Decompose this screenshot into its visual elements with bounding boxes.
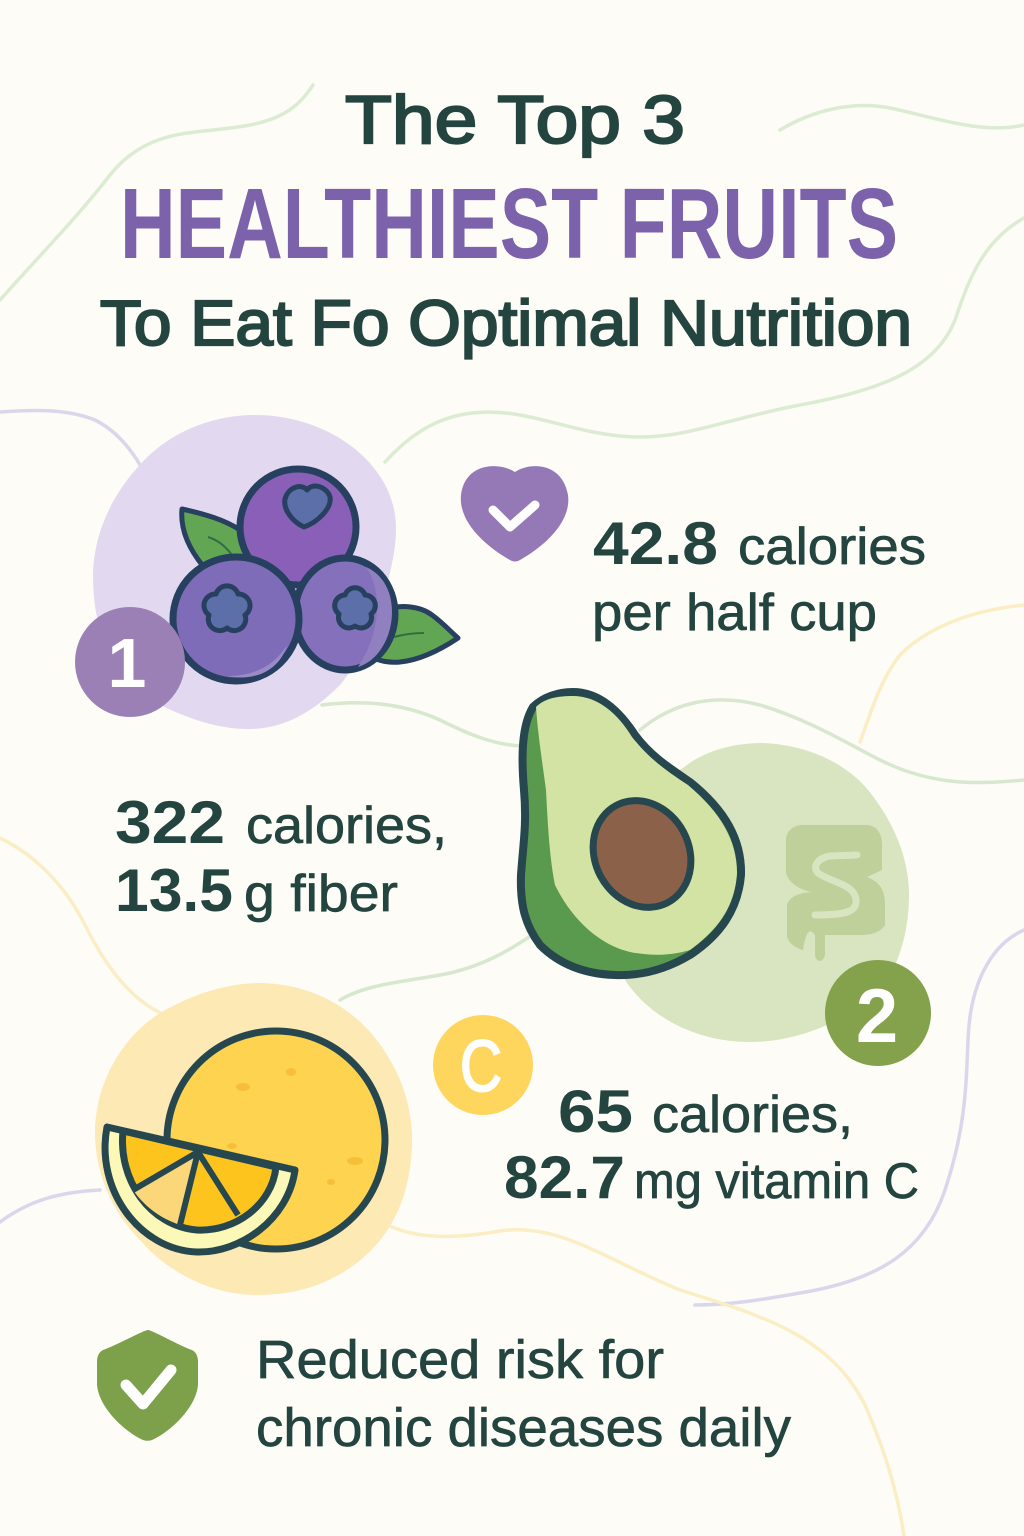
panel: avocado <box>521 692 931 1066</box>
icon: whole fruit <box>167 1031 385 1249</box>
icon: top berry <box>240 469 356 585</box>
text: blueberry stats: calories <box>738 518 926 576</box>
blueberry background blob <box>93 415 396 729</box>
text: blueberry stats: 42.8 <box>593 510 718 577</box>
badge: number 1: 1 <box>108 624 146 702</box>
avocado background blob <box>620 743 909 1042</box>
text: blueberry stats <box>592 510 926 642</box>
text: avocado stats: 13.5 <box>115 857 233 924</box>
text: citrus stats: mg vitamin C <box>634 1153 919 1209</box>
icon: avocado pit <box>575 783 709 925</box>
text: health benefit: Reduced risk for <box>256 1330 664 1390</box>
text: avocado stats: 322 <box>115 789 225 856</box>
text: health benefit <box>256 1330 791 1458</box>
icon: citrus slice <box>105 1127 295 1252</box>
badge: number 1 <box>75 607 185 717</box>
icon: gut <box>786 825 885 961</box>
title: To Eat Fo Optimal Nutrition <box>100 287 912 359</box>
icon: right berry <box>295 558 395 670</box>
badge: number 2 <box>825 960 931 1066</box>
text: citrus stats: 65 <box>558 1078 633 1145</box>
icon: avocado fruit <box>521 692 741 975</box>
icon: vitamin C <box>433 1015 533 1115</box>
title: The Top 3 <box>345 82 685 158</box>
icon: shield with check <box>97 1330 198 1441</box>
text: blueberry stats: per half cup <box>592 584 877 642</box>
citrus background blob <box>95 983 412 1295</box>
panel: citrus <box>95 983 412 1295</box>
text: citrus stats <box>504 1078 919 1211</box>
icon: right leaf <box>374 607 458 662</box>
text: citrus stats: 82.7 <box>504 1144 625 1211</box>
text: avocado stats: calories, <box>246 797 447 855</box>
icon: left berry <box>173 557 299 681</box>
text: health benefit: chronic diseases daily <box>256 1398 791 1458</box>
title <box>100 82 912 359</box>
icon: left leaf <box>182 509 250 566</box>
text: avocado stats <box>115 789 447 924</box>
icon: heart with check <box>461 466 568 562</box>
text: avocado stats: g fiber <box>244 865 398 923</box>
badge: number 2: 2 <box>856 974 898 1059</box>
icon: vitamin C: C <box>460 1027 502 1107</box>
panel: blueberries <box>75 415 458 729</box>
text: citrus stats: calories, <box>652 1086 853 1144</box>
